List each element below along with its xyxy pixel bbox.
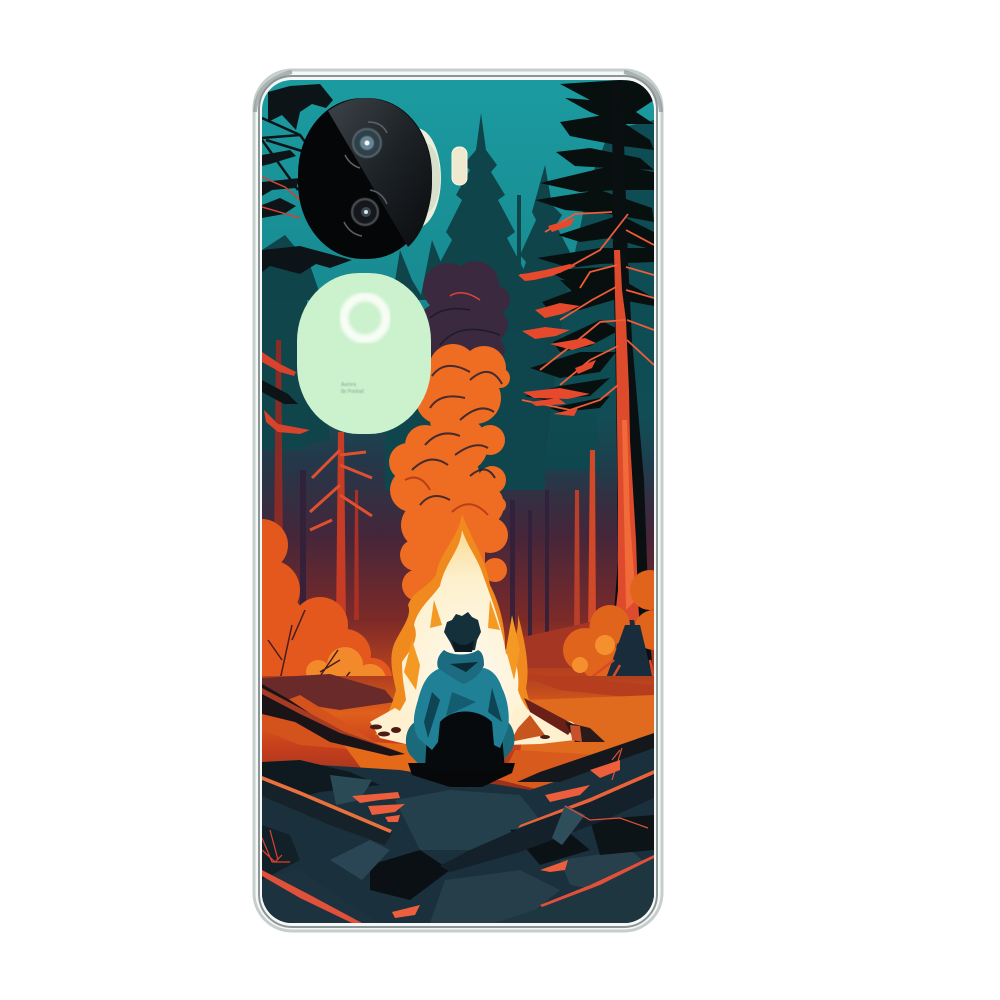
right large pine tree xyxy=(518,80,654,684)
left branches silhouette xyxy=(262,84,352,434)
black foliage xyxy=(525,80,654,412)
red branches xyxy=(520,212,654,410)
fallen logs xyxy=(262,684,654,923)
background pine trees xyxy=(262,113,600,470)
mint camera-cut panel: 8x Portrait xyxy=(341,389,364,395)
dark rubble foreground xyxy=(262,745,654,923)
mint camera-cut panel xyxy=(297,273,431,434)
fire logs xyxy=(370,698,605,745)
camera module xyxy=(298,98,432,259)
glowing ring xyxy=(344,297,386,339)
forest floor embers xyxy=(262,672,654,800)
artwork panel xyxy=(262,80,654,923)
bonfire flames xyxy=(375,514,530,736)
moonlike cream crescent behind camera xyxy=(419,128,441,226)
legs xyxy=(406,722,426,763)
lower lens xyxy=(344,190,387,236)
flame tongues xyxy=(404,600,520,690)
right orange bushes xyxy=(524,570,654,676)
product image: phone case with campfire forest art xyxy=(252,68,664,932)
jacket xyxy=(414,668,509,750)
dim red forest trunks xyxy=(274,340,596,636)
smoke details xyxy=(430,293,500,345)
dry grass tufts xyxy=(262,830,290,862)
small print: Aurora xyxy=(341,382,356,388)
sky and forest backdrop xyxy=(262,80,654,923)
trunk xyxy=(612,144,653,676)
head xyxy=(444,612,481,652)
cloud shadow curls xyxy=(412,366,502,505)
flash window xyxy=(452,147,467,185)
purple smoke column xyxy=(423,261,510,358)
red embers and patches xyxy=(352,760,620,918)
seated man xyxy=(406,612,515,787)
upper lens xyxy=(345,122,387,168)
hood xyxy=(437,650,484,684)
clear case shell xyxy=(254,70,662,931)
orange smoke cloud xyxy=(389,344,510,601)
left orange bushes xyxy=(262,519,392,676)
